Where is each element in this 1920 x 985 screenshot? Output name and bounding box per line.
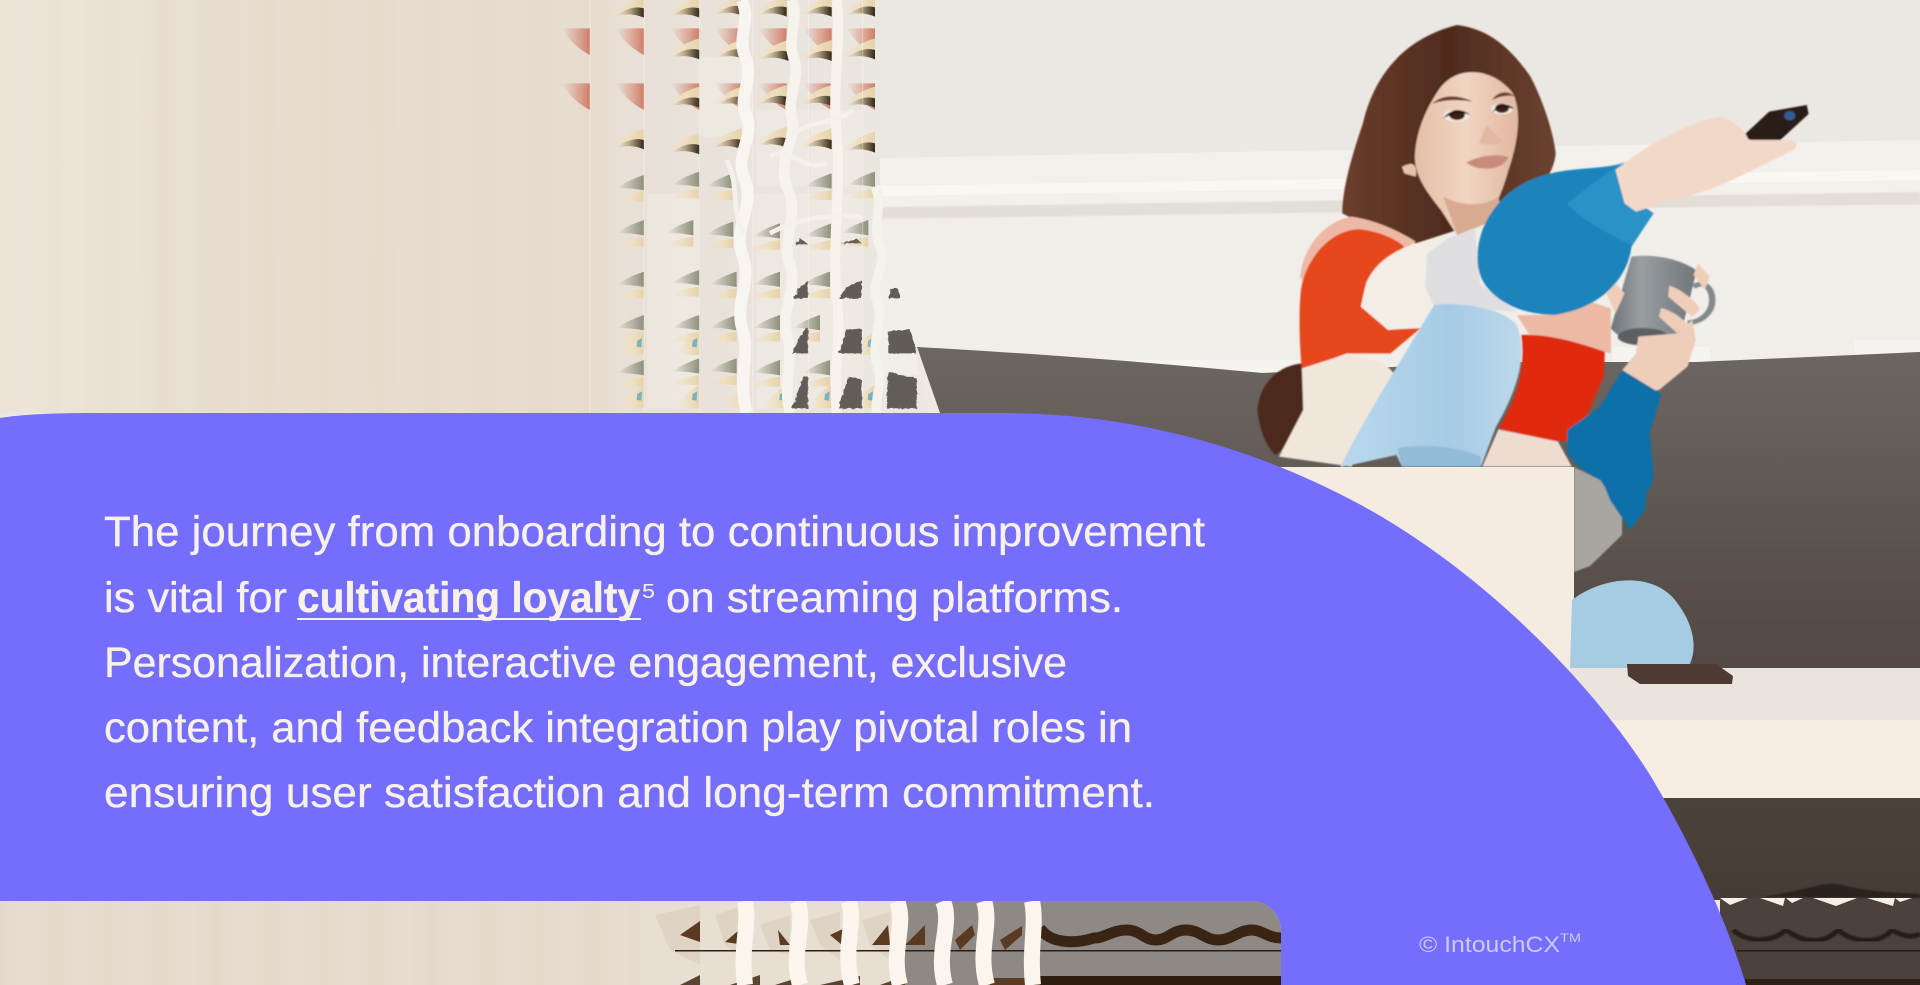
phone on table: [1627, 664, 1733, 684]
glitched bottom right sofa: [1720, 884, 1920, 985]
jeans leg: [1340, 304, 1521, 467]
sweater pink and red right: [1517, 302, 1611, 353]
hair: [1342, 25, 1556, 243]
hand with remote: [1742, 105, 1809, 146]
body paragraph: content, and feedback integration play pivotal roles in: [104, 704, 1132, 752]
white armrest: [1250, 467, 1574, 700]
jeans foot: [1570, 580, 1694, 668]
grid lines: [590, 0, 863, 413]
body paragraph: Personalization, interactive engagement, exclusive: [104, 639, 1067, 687]
sleeve white: [1362, 217, 1517, 330]
neck and face: [1415, 72, 1518, 235]
body paragraph: 5: [642, 581, 655, 603]
body paragraph: is vital for: [104, 574, 287, 622]
sweater shoulder: [1300, 217, 1416, 293]
sweater white band: [1279, 354, 1397, 467]
body paragraph: The journey from onboarding to continuous improvement: [104, 508, 1205, 556]
background: striped beige curtain: [0, 0, 880, 413]
mug: [1687, 284, 1712, 323]
grey sweater hem: [1574, 467, 1622, 572]
blue cuff: [1567, 370, 1661, 500]
glitch curtain pattern: [562, 0, 940, 413]
copyright: © IntouchCX: [1419, 932, 1560, 957]
body paragraph: ensuring user satisfaction and long-term commitment.: [104, 769, 1155, 817]
white table: [1560, 668, 1920, 798]
copyright: TM: [1560, 931, 1581, 945]
mug hand: [1659, 286, 1699, 333]
braid: [1257, 363, 1303, 455]
body paragraph: [104, 508, 1205, 817]
body paragraph: on streaming platforms.: [666, 574, 1123, 622]
bottom strip photo fragment: [0, 901, 1281, 985]
highlighted phrase: cultivating loyalty: [297, 574, 640, 622]
cell motifs by grid: [609, 0, 644, 18]
sweater orange band: [1300, 229, 1420, 370]
wavy white ribbons: [740, 0, 749, 413]
pale shapes: [647, 57, 862, 408]
background: sofa: [917, 347, 1920, 900]
white vertical ribbons: [744, 901, 1034, 985]
blue sleeve: [1478, 163, 1653, 315]
purple panel: [0, 413, 1746, 985]
woman on the sofa: [1257, 25, 1809, 572]
grey sofa fragments: [792, 238, 917, 408]
